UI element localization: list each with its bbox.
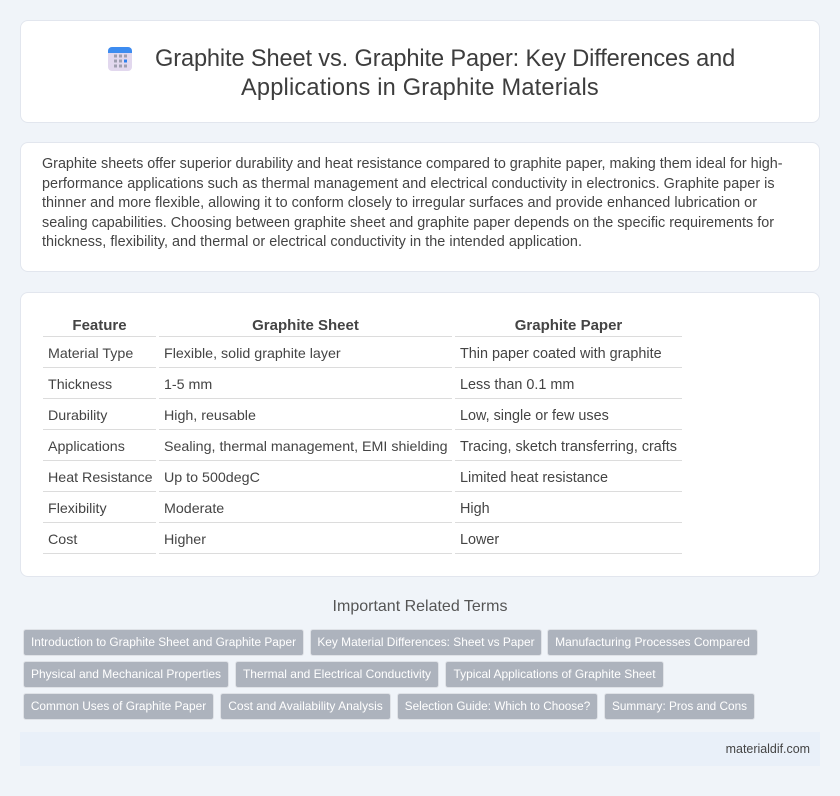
intro paragraph: sealing capabilities. Choosing between graphite sheet and graphite paper depends on the specific requirements for bbox=[42, 215, 774, 231]
intro paragraph bbox=[42, 156, 783, 250]
intro paragraph: thinner and more flexible, allowing it to conform closely to irregular surfaces and provide enhanced lubrication or bbox=[42, 195, 757, 211]
comparison table: Heat Resistance bbox=[48, 470, 153, 486]
comparison table: High bbox=[460, 501, 490, 517]
related term tags: Manufacturing Processes Compared bbox=[555, 635, 750, 649]
comparison table: Less than 0.1 mm bbox=[460, 377, 574, 393]
comparison table: Applications bbox=[48, 439, 125, 455]
related term tags: Cost and Availability Analysis bbox=[228, 699, 383, 713]
related term tags bbox=[23, 629, 758, 720]
comparison table: Lower bbox=[460, 532, 499, 548]
comparison table: Higher bbox=[164, 532, 206, 548]
comparison table: Sealing, thermal management, EMI shielding bbox=[164, 439, 448, 455]
comparison table: Up to 500degC bbox=[164, 470, 260, 486]
footer source text: materialdif.com bbox=[726, 742, 810, 756]
panel: comparison table bbox=[20, 292, 820, 577]
table header row: Graphite Paper bbox=[515, 317, 622, 334]
comparison table: Cost bbox=[48, 532, 77, 548]
comparison table: High, reusable bbox=[164, 408, 256, 424]
intro paragraph: performance applications such as thermal management and electrical conductivity in electronics. Graphite paper is bbox=[42, 176, 775, 192]
related term tags: Key Material Differences: Sheet vs Paper bbox=[317, 635, 535, 649]
related term tags: Introduction to Graphite Sheet and Graphite Paper bbox=[31, 635, 296, 649]
table header row: Graphite Sheet bbox=[252, 317, 359, 334]
footer bar bbox=[20, 732, 820, 766]
comparison table: Thickness bbox=[48, 377, 112, 393]
title: Graphite Sheet vs. Graphite Paper: Key Differences and bbox=[155, 46, 735, 72]
table header row: Feature bbox=[72, 317, 127, 334]
title bbox=[155, 46, 735, 101]
comparison table: Low, single or few uses bbox=[460, 408, 609, 424]
comparison table: Tracing, sketch transferring, crafts bbox=[460, 439, 677, 455]
comparison table: Limited heat resistance bbox=[460, 470, 608, 486]
comparison table bbox=[43, 317, 682, 554]
related term tags: Thermal and Electrical Conductivity bbox=[243, 667, 431, 681]
table header row bbox=[72, 317, 622, 334]
comparison table: Moderate bbox=[164, 501, 224, 517]
comparison table: Durability bbox=[48, 408, 107, 424]
icon: calendar grid bbox=[108, 47, 132, 71]
comparison table: Flexibility bbox=[48, 501, 107, 517]
comparison table: Material Type bbox=[48, 346, 133, 362]
related term tags: Summary: Pros and Cons bbox=[612, 699, 747, 713]
header card bbox=[20, 20, 820, 123]
comparison table: 1-5 mm bbox=[164, 377, 212, 393]
related term tags: Physical and Mechanical Properties bbox=[31, 667, 221, 681]
panel: introduction text bbox=[20, 142, 820, 272]
intro paragraph: thickness, flexibility, and thermal or electrical conductivity in the intended application. bbox=[42, 234, 582, 250]
comparison table: Flexible, solid graphite layer bbox=[164, 346, 341, 362]
related term tags: Common Uses of Graphite Paper bbox=[31, 699, 206, 713]
comparison table: Thin paper coated with graphite bbox=[460, 346, 662, 362]
title: Applications in Graphite Materials bbox=[241, 75, 599, 101]
related term tags: Typical Applications of Graphite Sheet bbox=[453, 667, 656, 681]
heading: important related terms: Important Related Terms bbox=[333, 598, 507, 615]
intro paragraph: Graphite sheets offer superior durability and heat resistance compared to graphite paper, making them ideal for high- bbox=[42, 156, 783, 172]
related term tags: Selection Guide: Which to Choose? bbox=[405, 700, 590, 713]
